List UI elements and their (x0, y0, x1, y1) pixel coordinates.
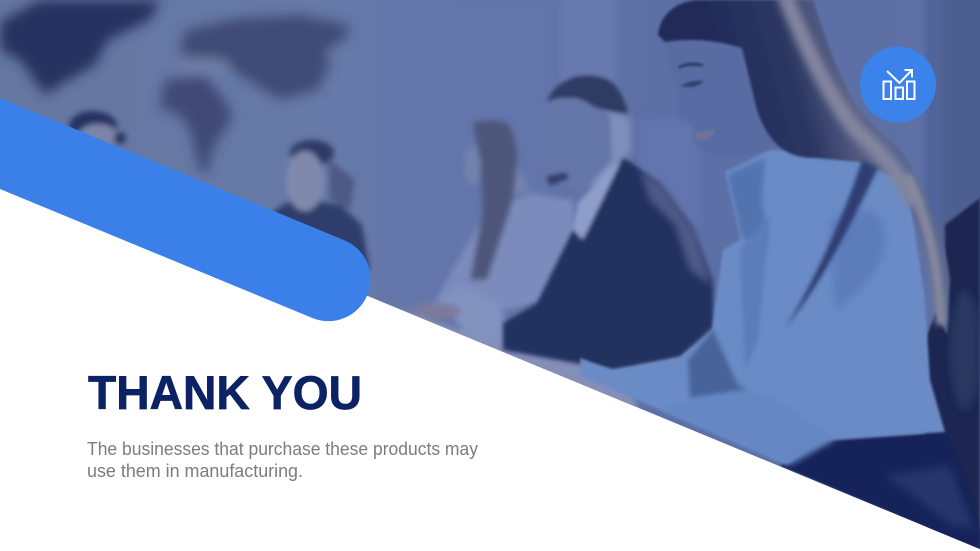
man beard (546, 172, 570, 186)
man head (552, 96, 612, 182)
hands on table (402, 302, 639, 408)
shirt placket (741, 228, 766, 361)
sleeve shadow (832, 211, 884, 304)
diagonal blue bar (0, 98, 370, 321)
icon arrow (887, 70, 912, 83)
hair mass (658, 0, 950, 335)
shirt collar shadow (728, 159, 766, 240)
shirt inner arm shadow (688, 330, 748, 398)
long hair (658, 0, 950, 335)
man neck fade (585, 108, 632, 190)
blurred colleague woman (272, 140, 370, 270)
shirt (580, 150, 945, 465)
blurred colleague with long hair (430, 120, 575, 312)
badge circle (860, 46, 936, 122)
face (677, 61, 714, 144)
dark strand over shirt (785, 160, 878, 328)
man in dark suit (503, 76, 713, 370)
body text (87, 438, 479, 481)
hair lower strand (907, 175, 941, 325)
man shirt collar (573, 165, 625, 240)
body line 1: The businesses that purchase these products may (87, 438, 479, 459)
title: THANK YOU (88, 367, 362, 420)
sleeve fold (782, 439, 836, 468)
icon bars (884, 82, 914, 99)
skirt (780, 432, 980, 551)
world map (0, 0, 350, 172)
icon badge: bar chart with arrow (860, 46, 936, 122)
body line 2: use them in manufacturing. (87, 460, 303, 481)
man hair (547, 76, 628, 114)
hair light streak (785, 0, 915, 205)
man shoulder highlight (640, 170, 712, 285)
man jacket (503, 157, 713, 370)
wall panels (564, 0, 980, 306)
blurred colleague far left (69, 111, 126, 148)
woman in blue shirt (580, 0, 980, 551)
chair right (925, 198, 980, 551)
